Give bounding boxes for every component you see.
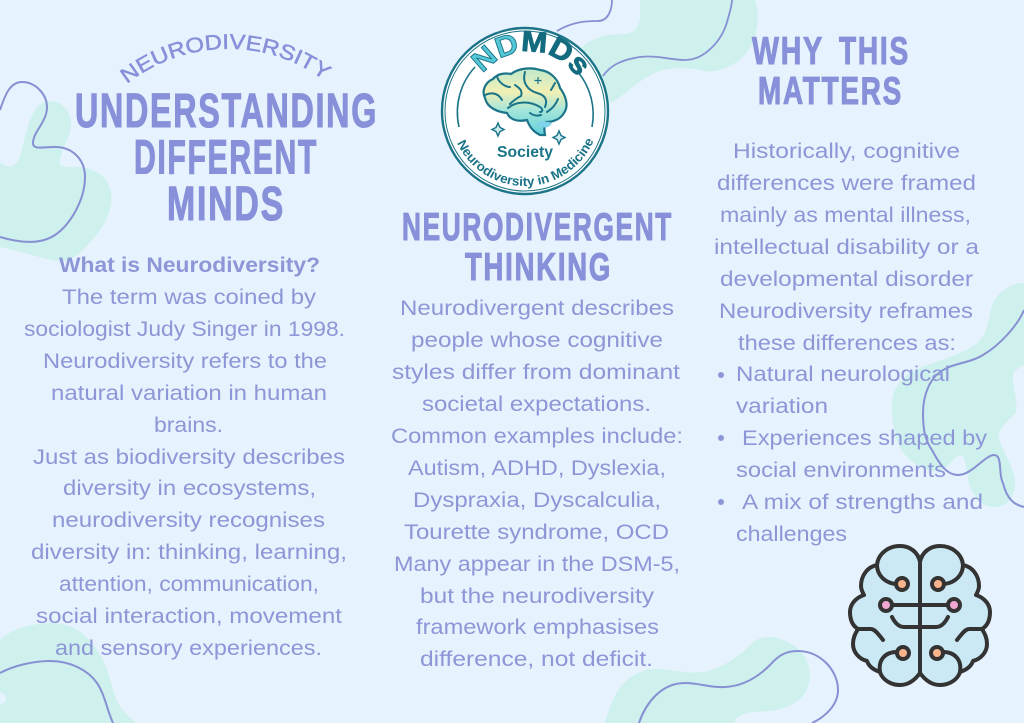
bullet list: reframing: Experiences shaped by [742,426,987,450]
text block: what is neurodiversity: Neurodiversity refers to the [43,349,327,373]
text block: neurodivergent description: framework emphasises [416,615,659,639]
logo text: NDMDs: NDMDs [470,30,587,75]
text block: neurodivergent description: difference, not deficit. [420,647,653,671]
bullet list: reframing: variation [736,394,828,418]
bullet list: reframing [718,362,987,546]
text block: what is neurodiversity: social interaction, movement [36,604,342,628]
text block: history of framing: differences were framed [717,171,976,195]
text block: history of framing: Historically, cognitive [733,139,960,163]
icon: brain [484,68,567,135]
decorative blob: bottom left [0,623,137,723]
text block: history of framing: mainly as mental illness, [720,203,971,227]
text block: what is neurodiversity: attention, communication, [59,572,319,596]
heading: THIS [839,30,910,73]
text block: what is neurodiversity [24,253,347,660]
text block: neurodivergent description: Autism, ADHD, Dyslexia, [408,456,666,480]
panel: neurodivergent thinking [391,206,683,671]
text block: history of framing: these differences as: [738,331,956,355]
text block: what is neurodiversity: diversity in ecosystems, [63,476,316,500]
bullet list: reframing: Natural neurological [736,362,950,386]
text block: neurodivergent description: Dyspraxia, Dyscalculia, [413,488,661,512]
bullet list: reframing: A mix of strengths and [742,490,983,514]
text block: history of framing: intellectual disability or a [714,235,979,259]
panel: why this matters [714,30,987,546]
text block: what is neurodiversity: and sensory experiences. [55,636,322,660]
decorative blob: bottom centre [605,637,838,723]
icon: sparkles [492,123,565,144]
text block: neurodivergent description: Common examples include: [391,424,683,448]
decorative blob: left [0,82,111,261]
text block: neurodivergent description: but the neurodiversity [420,584,654,608]
text block: what is neurodiversity: Just as biodiversity describes [33,445,345,469]
text block: history of framing: Neurodiversity reframes [719,299,973,323]
title: UNDERSTANDING [75,85,378,138]
text block: neurodivergent description: styles differ from dominant [392,360,680,384]
heading [752,30,910,113]
text block: what is neurodiversity: natural variation in human [51,381,327,405]
text block: neurodivergent description: Tourette syndrome, OCD [404,520,669,544]
heading: NEURODIVERGENT [402,206,673,249]
bullet list: reframing: social environments [736,458,946,482]
title: DIFFERENT [134,132,318,184]
logo text: neurodiversity in medicine: Neurodiversity in Medicine [457,139,593,189]
decorative blob: top centre [557,0,758,105]
text block: neurodivergent description: Many appear in the DSM-5, [394,552,680,576]
curved heading: neurodiversity: NEURODIVERSITY [120,34,332,83]
bullet list: reframing: challenges [736,522,847,546]
text block: what is neurodiversity: The term was coined by [62,285,316,309]
title: MINDS [167,178,285,231]
text block: neurodivergent description: Neurodivergent describes [400,296,674,320]
text block: what is neurodiversity: diversity in: thinking, learning, [31,540,347,564]
text block: neurodivergent description: societal expectations. [422,392,651,416]
text block: neurodivergent description: people whose cognitive [411,328,663,352]
icon: circuit brain [850,546,990,685]
text block: what is neurodiversity: sociologist Judy Singer in 1998. [24,317,345,341]
text block: neurodivergent description [391,296,683,671]
text block: history of framing: developmental disorder [720,267,973,291]
heading: THINKING [465,246,612,289]
heading: WHY [752,30,824,73]
decorative blob: right [892,283,1024,507]
text block: history of framing [714,139,979,355]
heading: MATTERS [758,70,903,113]
text block: what is neurodiversity: What is Neurodiversity? [59,253,320,277]
logo text: society: Society [497,144,553,161]
text block: what is neurodiversity: neurodiversity recognises [52,508,325,532]
title [75,85,378,231]
logo: NDMDs society badge [440,26,610,196]
heading [402,206,673,289]
panel: understanding different minds [24,34,378,660]
text block: what is neurodiversity: brains. [154,413,223,437]
